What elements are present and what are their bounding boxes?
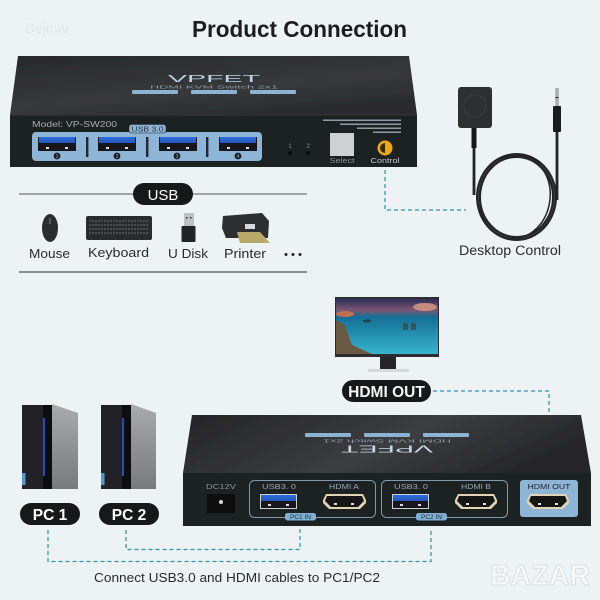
USB port 4: [219, 137, 257, 151]
dashed connector: PC2: [126, 529, 300, 550]
icon: u disk: [182, 213, 196, 242]
PC2 input group: PC2 IN: [421, 514, 442, 521]
PC 1 tower: [22, 404, 78, 489]
bottom KVM switch device: [183, 415, 591, 526]
control jack: [370, 140, 400, 165]
status LEDs: [288, 144, 310, 155]
upside-down brand: HDMI KVM Switch 2x1: [322, 438, 451, 444]
port numbers: 3: [176, 154, 179, 160]
USB section: Printer: [224, 246, 267, 261]
USB port 3: [159, 137, 197, 151]
PC1 input group: PC1 IN: [290, 514, 311, 521]
port numbers: [54, 153, 241, 160]
PC 2 tower: [101, 404, 156, 489]
USB section: U Disk: [168, 246, 209, 261]
model label: Model: VP-SW200: [32, 120, 118, 129]
PC2 input group: USB3. 0: [394, 484, 428, 491]
dashed connector: control to desktop control: [385, 170, 466, 210]
desktop control cable: [458, 87, 561, 244]
top KVM switch device: [10, 56, 417, 167]
port numbers: 1: [56, 154, 59, 160]
feature tags: [132, 90, 296, 94]
dashed connector: PC1: [48, 529, 431, 562]
icon: printer: [222, 213, 270, 243]
PC 1 label: PC 1: [33, 507, 68, 524]
USB section: [19, 183, 307, 272]
more dots: [284, 253, 302, 256]
PC 1 label: [20, 503, 80, 525]
DC power jack: DC12V: [206, 484, 236, 491]
HDMI OUT port: HDMI OUT: [528, 484, 571, 491]
dashed connector: HDMI out: [433, 391, 549, 478]
USB 3.0 badge: [129, 124, 166, 134]
Bazar watermark: BAZAR: [490, 560, 590, 592]
HDMI OUT label: HDMI OUT: [348, 384, 425, 401]
top KVM switch device: HDMI KVM Switch 2x1: [150, 84, 279, 90]
vent lines: [323, 120, 401, 133]
PC 2 label: [99, 503, 159, 525]
upside-down brand: [322, 438, 451, 454]
USB port 1: [38, 137, 76, 151]
faint watermark top left: Dejmar: [25, 20, 70, 36]
status LEDs: 1: [288, 144, 292, 150]
audio jack plug: [553, 88, 561, 132]
DC power jack: [206, 484, 236, 513]
select button: Select: [330, 158, 355, 165]
HDMI OUT label: [342, 380, 431, 402]
PC1 input group: USB3. 0: [262, 484, 296, 491]
monitor: [335, 297, 439, 372]
device labels: Mouse: [29, 246, 70, 261]
control puck: [458, 87, 492, 128]
USB pill heading: [133, 183, 193, 205]
caption: Connect USB3.0 and HDMI cables to PC1/PC2: [94, 570, 380, 585]
HDMI OUT port: [520, 480, 578, 517]
icon: mouse: [42, 214, 58, 242]
brand text: VPFET: [168, 74, 260, 85]
icon: keyboard: [86, 216, 152, 240]
port numbers: 2: [116, 154, 119, 160]
PC 2 label: PC 2: [112, 507, 146, 524]
USB section: Keyboard: [88, 245, 149, 260]
select button: [330, 133, 355, 165]
coiled cable: [473, 150, 557, 244]
USB 3.0 badge: USB 3.0: [132, 126, 164, 134]
USB pill heading: USB: [148, 187, 178, 204]
USB port 2: [98, 137, 136, 151]
desktop control label: Desktop Control: [459, 243, 561, 258]
PC1 input group: [250, 480, 376, 521]
PC2 input group: HDMI B: [461, 484, 491, 491]
PC2 input group: [382, 480, 508, 521]
upside-down brand: VPFET: [341, 442, 433, 454]
status LEDs: 2: [306, 144, 310, 150]
PC1 input group: HDMI A: [329, 484, 359, 491]
port numbers: 4: [237, 154, 240, 160]
title: Product Connection: [192, 16, 407, 42]
control jack: Control: [370, 156, 400, 165]
USB port panel: [32, 132, 262, 161]
